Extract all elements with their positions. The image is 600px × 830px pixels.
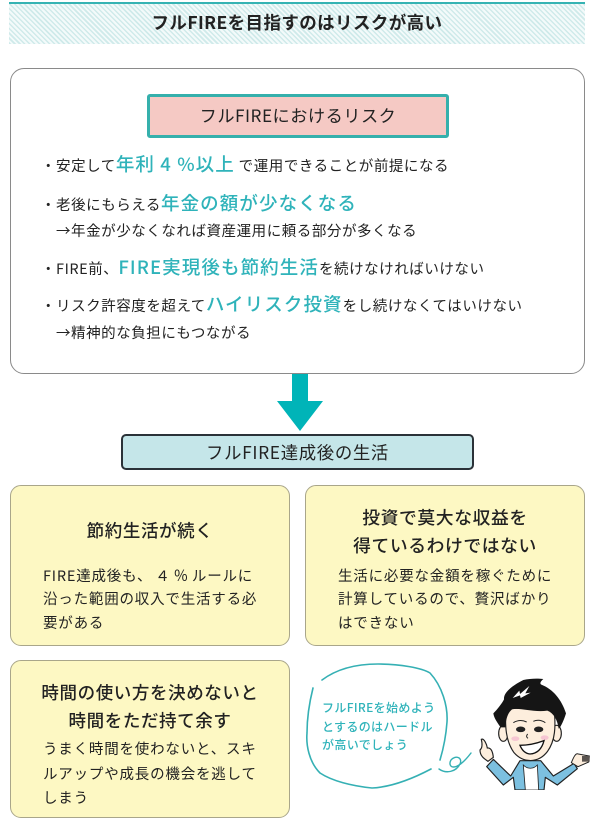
risk 4 detail: →精神的な負担にもつながる [56, 322, 251, 343]
mouth [520, 741, 544, 754]
card: too much free time [10, 660, 290, 818]
speech bubble text: フルFIREを始めよう [322, 699, 435, 716]
card body: ルアップや成長の機会を逃して [43, 762, 257, 784]
eyes and brows [516, 726, 525, 732]
card body: 生活に必要な金額を稼ぐために [338, 565, 552, 586]
card heading: 時間の使い方を決めないと [41, 680, 259, 705]
card body: しまう [43, 787, 89, 808]
speech bubble text: とするのはハードル [322, 718, 433, 734]
nose [527, 734, 528, 738]
card body: 計算しているので、贅沢ばかり [338, 588, 551, 609]
arrow [277, 374, 323, 431]
card body [338, 565, 552, 633]
left hand pointing [480, 739, 493, 761]
card: not earning huge profits [305, 485, 585, 646]
risk 4: ・リスク許容度を超えてハイリスク投資をし続けなくてはいけない [41, 291, 523, 317]
card body: 要がある [43, 612, 104, 633]
risk 2 detail: →年金が少なくなれば資産運用に頼る部分が多くなる [56, 220, 417, 241]
card body: 沿った範囲の収入で生活する必 [43, 588, 257, 609]
icon: smiling man character [479, 678, 590, 790]
panel: risks [10, 68, 585, 374]
card heading [353, 504, 537, 558]
speech bubble text [322, 699, 435, 753]
card heading: 得ているわけではない [353, 532, 537, 558]
card body [43, 565, 257, 633]
card body: はできない [338, 612, 414, 633]
card: frugal life continues [10, 485, 290, 646]
speech bubble text: が高いでしょう [322, 736, 408, 753]
hair [493, 679, 566, 729]
card body: うまく時間を使わないと、スキ [43, 738, 257, 759]
heading: life after full FIRE [121, 434, 474, 470]
cheeks [511, 736, 519, 741]
risk 3: ・FIRE前、FIRE実現後も節約生活を続けなければいけない [41, 254, 485, 280]
ears [499, 725, 508, 741]
heading: risks in full FIRE [147, 94, 449, 138]
right hand [571, 754, 589, 767]
card body: FIRE達成後も、４％ルールに [43, 565, 253, 586]
risk 1: ・安定して年利 4 %以上 で運用できることが前提になる [41, 151, 449, 177]
title: フルFIREを目指すのはリスクが高い [152, 10, 442, 35]
risk 2: ・老後にもらえる年金の額が少なくなる [41, 190, 357, 216]
heading: risks in full FIRE: フルFIREにおけるリスク [200, 102, 396, 127]
speech bubble [306, 663, 472, 789]
shirt [523, 765, 539, 790]
jacket [487, 759, 577, 790]
card heading: 節約生活が続く [87, 518, 213, 543]
card heading: 投資で莫大な収益を [362, 504, 528, 530]
title banner [9, 2, 585, 44]
face [506, 708, 555, 761]
card heading [41, 680, 259, 733]
heading: life after full FIRE: フルFIRE達成後の生活 [206, 440, 389, 465]
card heading: 時間をただ持て余す [69, 708, 231, 733]
card body [43, 738, 257, 808]
